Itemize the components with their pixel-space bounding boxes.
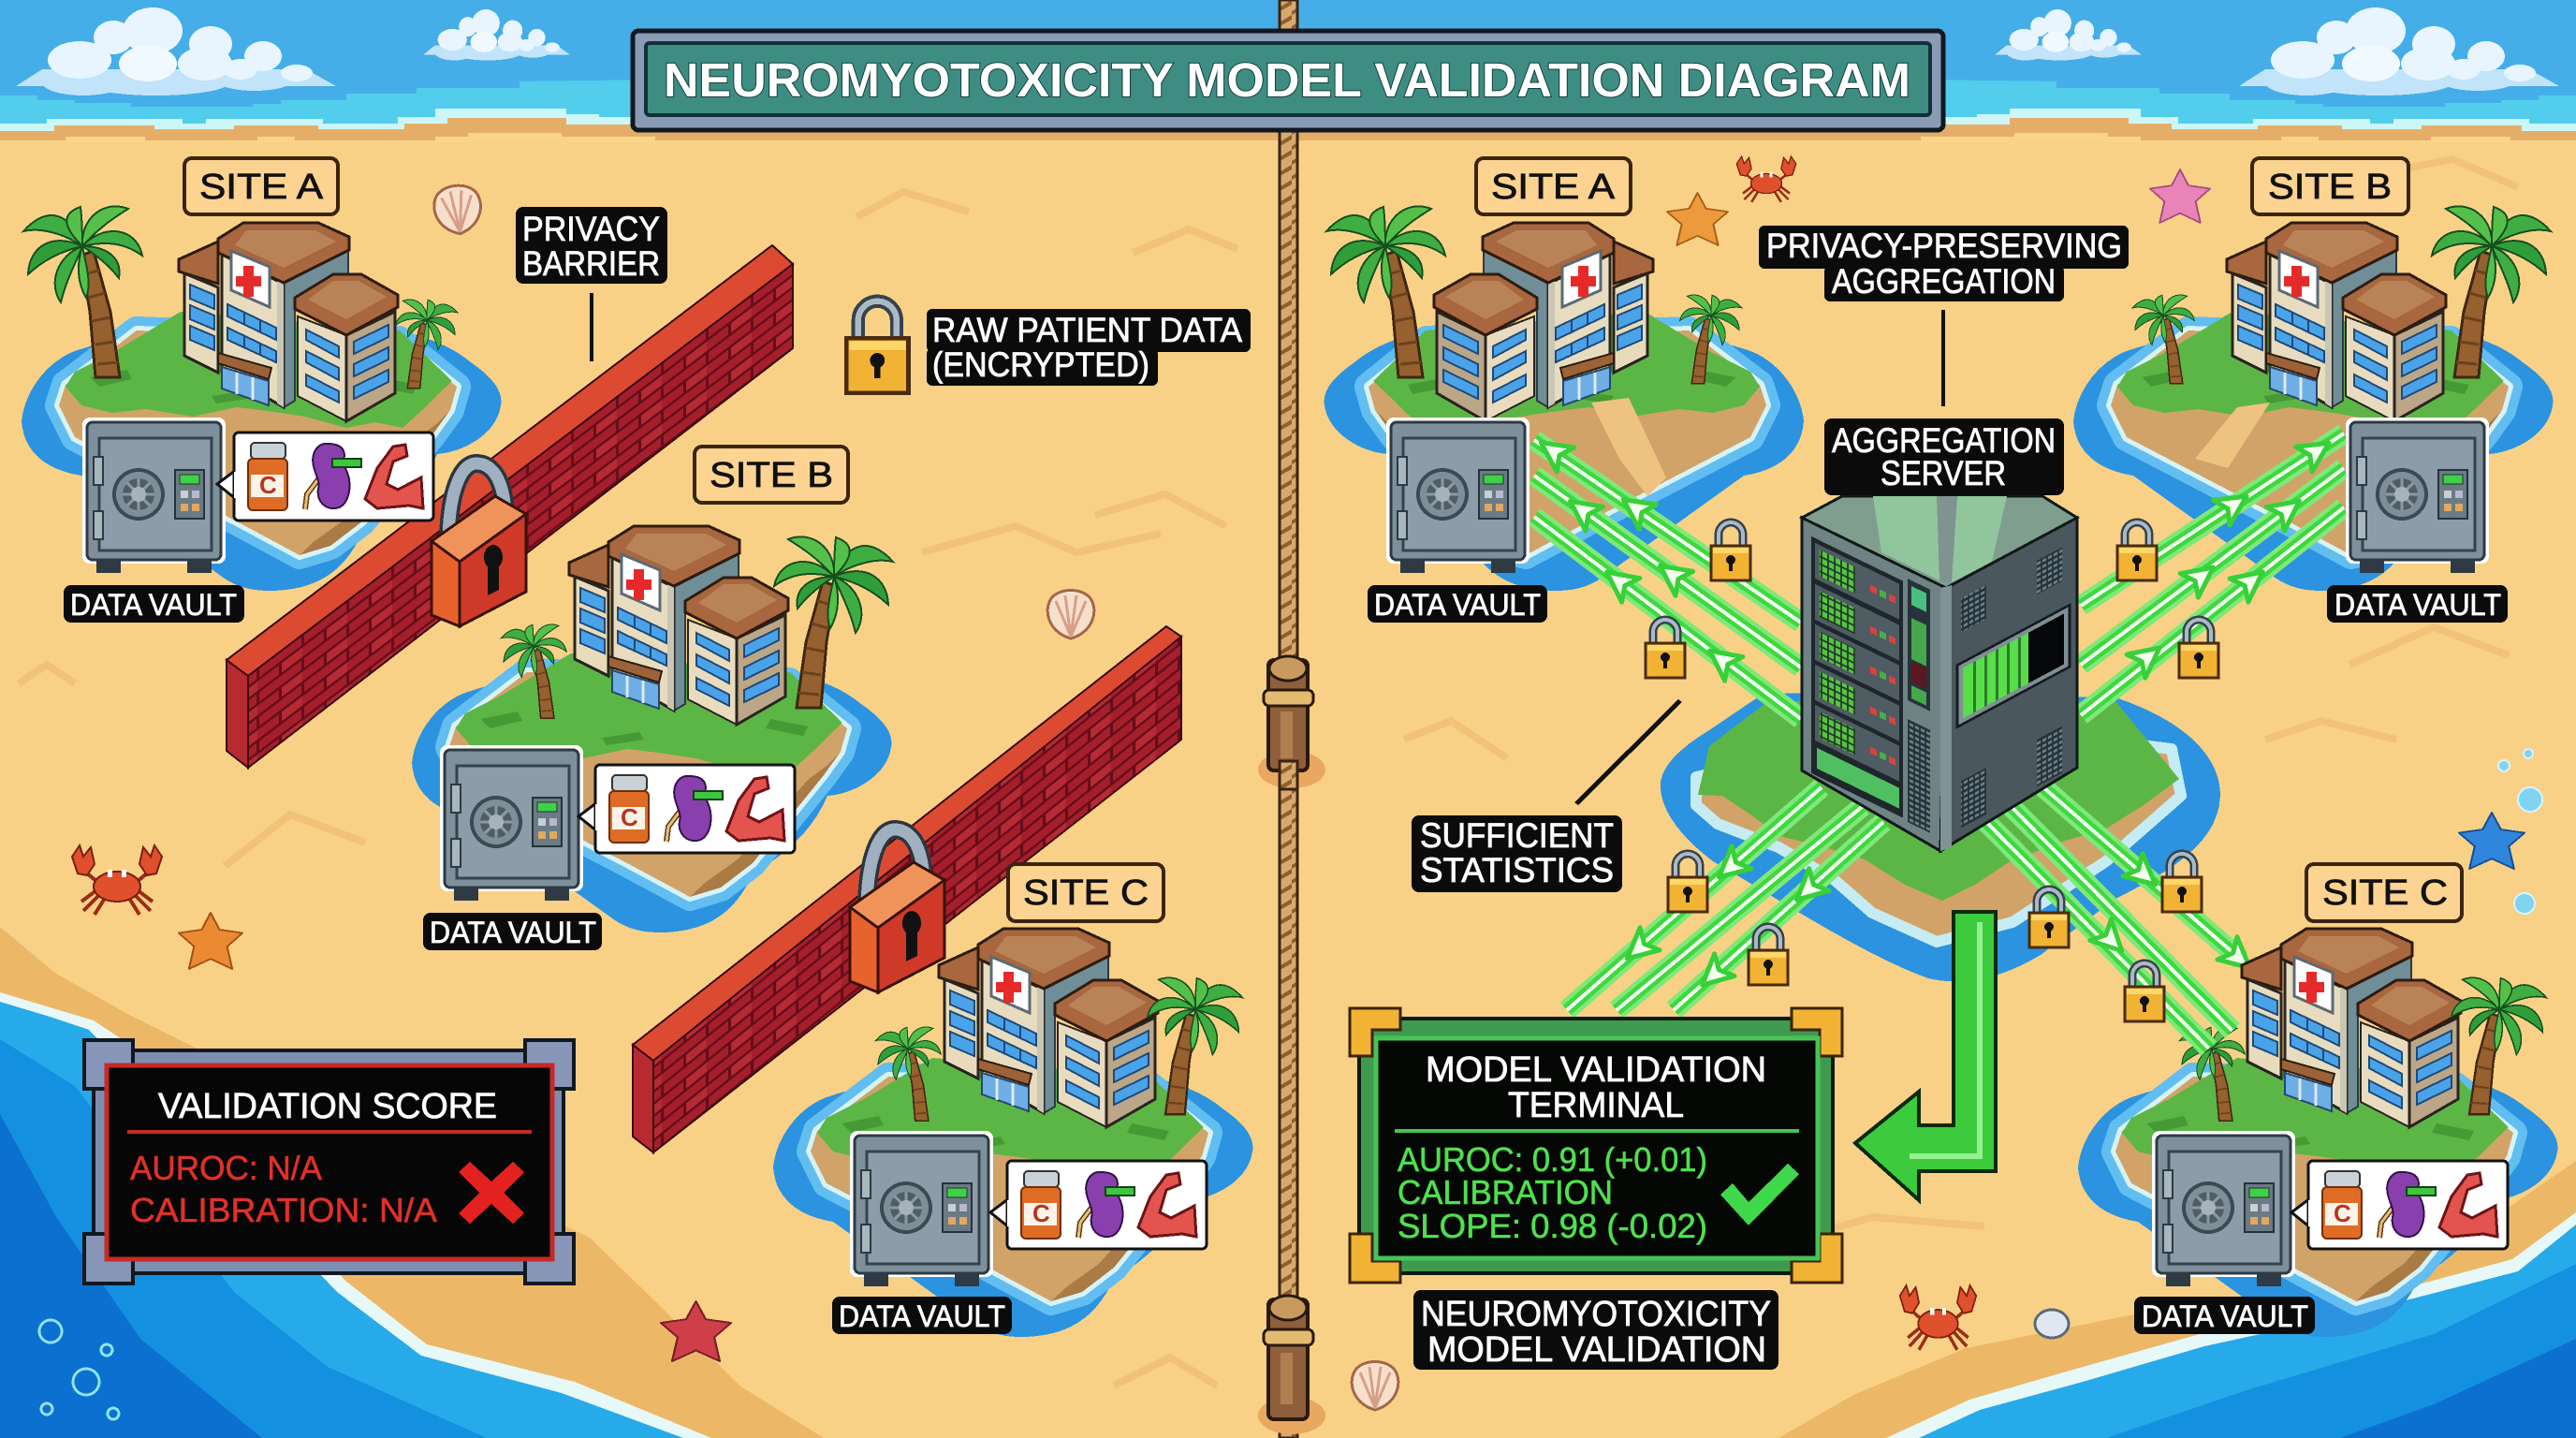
central island [1661, 693, 2220, 981]
sufficient statistics label: STATISTICS [1420, 851, 1614, 889]
background: bottom-left sea [0, 927, 824, 1438]
site B right: island [2073, 206, 2553, 591]
green check icon [1720, 1164, 1799, 1225]
sand path [2195, 403, 2270, 468]
privacy wall 1 [227, 245, 793, 768]
site B left data bubble: C [621, 803, 638, 831]
site C right label: SITE C [2322, 873, 2448, 913]
hospital [569, 526, 788, 725]
server right face [1940, 518, 2077, 851]
big green arrow to terminal [1855, 912, 1996, 1200]
site C right hospital and palm [2242, 929, 2546, 1127]
site B left label: SITE B [710, 456, 833, 495]
hospital [179, 223, 398, 421]
palm [1326, 206, 1445, 377]
terminal metrics: SLOPE: 0.98 (-0.02) [1398, 1207, 1707, 1245]
title banner [633, 31, 1943, 130]
privacy barrier label: PRIVACY [522, 210, 660, 248]
palm [875, 1027, 941, 1121]
privacy barrier label [516, 207, 667, 284]
red X icon [459, 1162, 524, 1224]
clouds [16, 7, 2559, 95]
title text: NEUROMYOTOXICITY MODEL VALIDATION DIAGRAM [664, 53, 1910, 107]
shell [1047, 590, 1094, 638]
secure data arrows to site A [1532, 431, 1801, 719]
site C right data bubble [2291, 1161, 2508, 1249]
site B left vault [423, 745, 602, 950]
site A left vault [64, 418, 244, 623]
palm [23, 206, 142, 377]
neuromyotoxicity model validation label: NEUROMYOTOXICITY [1421, 1295, 1771, 1334]
big palm [2432, 206, 2551, 377]
data vault label: DATA VAULT [430, 916, 596, 949]
left crab [72, 845, 162, 915]
site A right vault [1368, 418, 1547, 623]
site A left data bubble: C [259, 471, 277, 499]
secure data arrows to site B [2081, 431, 2344, 715]
site B left data bubble [578, 765, 795, 853]
orange starfish [1667, 193, 1728, 245]
rope post: lower [1258, 1296, 1325, 1434]
right air bubbles [2498, 749, 2542, 914]
terminal metrics [1398, 1140, 1707, 1245]
background: bottom-right sea [1778, 1161, 2576, 1438]
palm [501, 624, 566, 718]
terminal heading: TERMINAL [1508, 1086, 1684, 1125]
site C right label [2306, 864, 2462, 921]
stone [2035, 1310, 2069, 1338]
top crab [1736, 156, 1796, 202]
background: left shoreline [0, 80, 655, 142]
validation score panel [84, 1040, 574, 1284]
data vault label: DATA VAULT [839, 1299, 1005, 1333]
score values [130, 1149, 437, 1229]
padlock on wall 1 [432, 463, 526, 626]
site A left: island [22, 206, 501, 591]
terminal metrics: CALIBRATION [1398, 1173, 1613, 1211]
aggregation leader line [1941, 310, 1945, 406]
privacy-preserving aggregation label: AGGREGATION [1832, 262, 2056, 301]
padlock on wall 2 [850, 829, 944, 992]
raw patient data label: (ENCRYPTED) [932, 345, 1149, 384]
site A right: island [1325, 206, 1804, 591]
site C left vault [832, 1131, 1012, 1334]
encryption padlocks on arrows [1646, 522, 2218, 1021]
site B right label [2252, 158, 2408, 214]
bottom shell [1352, 1361, 1398, 1410]
data vault label: DATA VAULT [1374, 588, 1541, 622]
site C left: island [773, 929, 1252, 1337]
big palm [1148, 977, 1242, 1114]
terminal heading: MODEL VALIDATION [1426, 1050, 1766, 1090]
blue starfish [2459, 813, 2525, 869]
site B right label: SITE B [2268, 168, 2392, 207]
data vault label: DATA VAULT [2334, 588, 2501, 622]
aggregation server label: AGGREGATION [1832, 421, 2056, 460]
terminal metrics: AUROC: 0.91 (+0.01) [1398, 1140, 1707, 1179]
score values: AUROC: N/A [130, 1149, 322, 1187]
privacy barrier leader line [590, 293, 593, 361]
raw data padlock icon [846, 301, 909, 393]
privacy-preserving aggregation label: PRIVACY-PRESERVING [1766, 227, 2122, 265]
pink starfish [2150, 169, 2210, 223]
aggregation server [1802, 496, 2077, 851]
site C right: island [2078, 1027, 2557, 1337]
hospital [1434, 223, 1653, 421]
site C left label: SITE C [1023, 873, 1149, 913]
server top [1802, 496, 2077, 588]
sufficient statistics label: SUFFICIENT [1420, 816, 1614, 855]
score heading: VALIDATION SCORE [158, 1087, 497, 1126]
site A left label [184, 158, 338, 214]
orange starfish [179, 913, 242, 969]
site C right vault [2134, 1131, 2315, 1334]
background: sky [0, 0, 2576, 112]
small palm [1680, 295, 1742, 384]
center rope divider [1258, 0, 1325, 1438]
site C left data bubble [990, 1161, 1207, 1249]
red starfish [661, 1301, 731, 1361]
data vault label: DATA VAULT [70, 588, 237, 622]
model validation terminal [1350, 1008, 1842, 1283]
sufficient statistics leader line [1574, 699, 1682, 805]
site A left label: SITE A [199, 168, 324, 207]
big palm [774, 536, 893, 708]
site C right data bubble: C [2334, 1199, 2351, 1227]
aggregation server label [1824, 418, 2064, 495]
neuromyotoxicity model validation label [1413, 1290, 1778, 1370]
hospital [2227, 223, 2446, 421]
aggregation server label: SERVER [1881, 454, 2006, 492]
site B left: island [412, 526, 893, 932]
privacy barrier label: BARRIER [522, 244, 660, 283]
left water bubbles [39, 1320, 119, 1419]
background: right shoreline [1921, 80, 2576, 142]
raw patient data label: RAW PATIENT DATA [932, 311, 1242, 349]
shell [432, 183, 483, 236]
small palm [396, 300, 458, 389]
sand path [1591, 398, 1666, 496]
site C left label [1008, 864, 1164, 921]
site A right label: SITE A [1491, 168, 1616, 207]
terminal heading [1426, 1050, 1766, 1125]
site C left data bubble: C [1032, 1199, 1050, 1227]
sufficient statistics label [1412, 815, 1622, 892]
background: center shore band [637, 80, 1947, 140]
privacy wall 2 [633, 626, 1181, 1152]
hospital [939, 929, 1158, 1127]
small palm [2179, 1027, 2245, 1121]
server left face [1802, 518, 1946, 851]
score values: CALIBRATION: N/A [130, 1191, 437, 1229]
raw patient data label [927, 309, 1251, 386]
bottom crab [1900, 1285, 1976, 1350]
site A left data bubble [217, 433, 433, 521]
secure data arrows to site C [1986, 787, 2260, 1049]
site A right label [1476, 158, 1631, 214]
small palm [2132, 295, 2194, 384]
site B right vault [2327, 418, 2508, 623]
secure data arrows toward terminal [1567, 787, 1883, 1010]
neuromyotoxicity model validation label: MODEL VALIDATION [1427, 1330, 1766, 1370]
privacy-preserving aggregation label [1759, 226, 2129, 301]
rope post: upper [1258, 656, 1325, 789]
data vault label: DATA VAULT [2142, 1299, 2308, 1333]
site B left label [695, 447, 848, 503]
